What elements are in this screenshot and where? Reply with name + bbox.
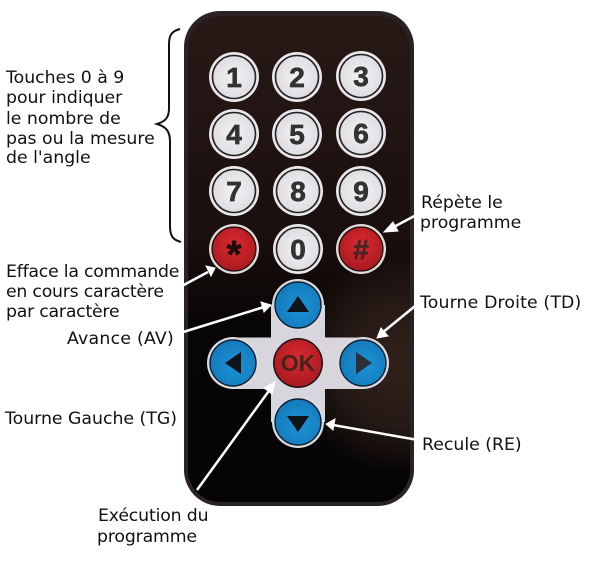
key 9: 9 [353,176,369,207]
label: clear command: en cours caractère [6,282,164,302]
label: number keys: pour indiquer [6,88,123,108]
label: turn left: Tourne Gauche (TG) [4,409,177,429]
arrow: reverse [326,419,418,440]
arrow: turn right [377,302,420,338]
label: clear command: Efface la commande [6,262,179,282]
key 5: 5 [289,119,305,150]
label: turn right: Tourne Droite (TD) [419,293,581,313]
key 5 [272,109,322,159]
key 4: 4 [226,119,242,150]
OK key [273,338,323,388]
key 0 [273,224,323,274]
label: reverse: Recule (RE) [422,435,522,455]
remote control body [184,11,414,506]
key 9 [336,166,386,216]
key 1 [209,52,259,102]
key 6: 6 [353,118,369,149]
key 3 [336,51,386,101]
key 2 [272,52,322,102]
directional pad [207,279,389,448]
key 2: 2 [289,62,305,93]
left key [207,337,259,389]
cross-shaped plate [233,305,363,422]
number keys 1 to 9 and 0 [209,51,386,274]
key star: * [227,234,242,276]
OK key: OK [281,350,316,376]
key 0: 0 [290,234,306,265]
label: forward: Avance (AV) [67,329,174,349]
key star [209,224,259,276]
label: number keys: pas ou la mesure [6,129,155,149]
right key [337,337,389,389]
arrow: forward [180,302,271,333]
label: number keys: Touches 0 à 9 [5,68,124,88]
label: repeat: Répète le [421,193,503,213]
key 4 [209,109,259,159]
key 7: 7 [226,176,242,207]
brace over number keys [157,29,181,242]
key 8: 8 [290,176,306,207]
key 8 [273,166,323,216]
label: number keys: le nombre de [6,109,121,129]
label: clear command: par caractère [6,302,119,322]
key 7 [209,166,259,216]
key hash: # [353,234,369,265]
key 1: 1 [226,62,242,93]
label: repeat: programme [420,213,521,233]
key 6 [336,108,386,158]
arrow: clear [180,266,215,287]
up key [272,279,324,331]
key 3: 3 [353,61,369,92]
label: execute: Exécution du [98,506,208,526]
key hash [336,224,386,274]
down key [272,396,324,448]
arrow: repeat [384,213,420,232]
label: number keys: de l'angle [6,148,91,168]
label: execute: programme [97,527,197,547]
arrow: execute [197,382,275,490]
